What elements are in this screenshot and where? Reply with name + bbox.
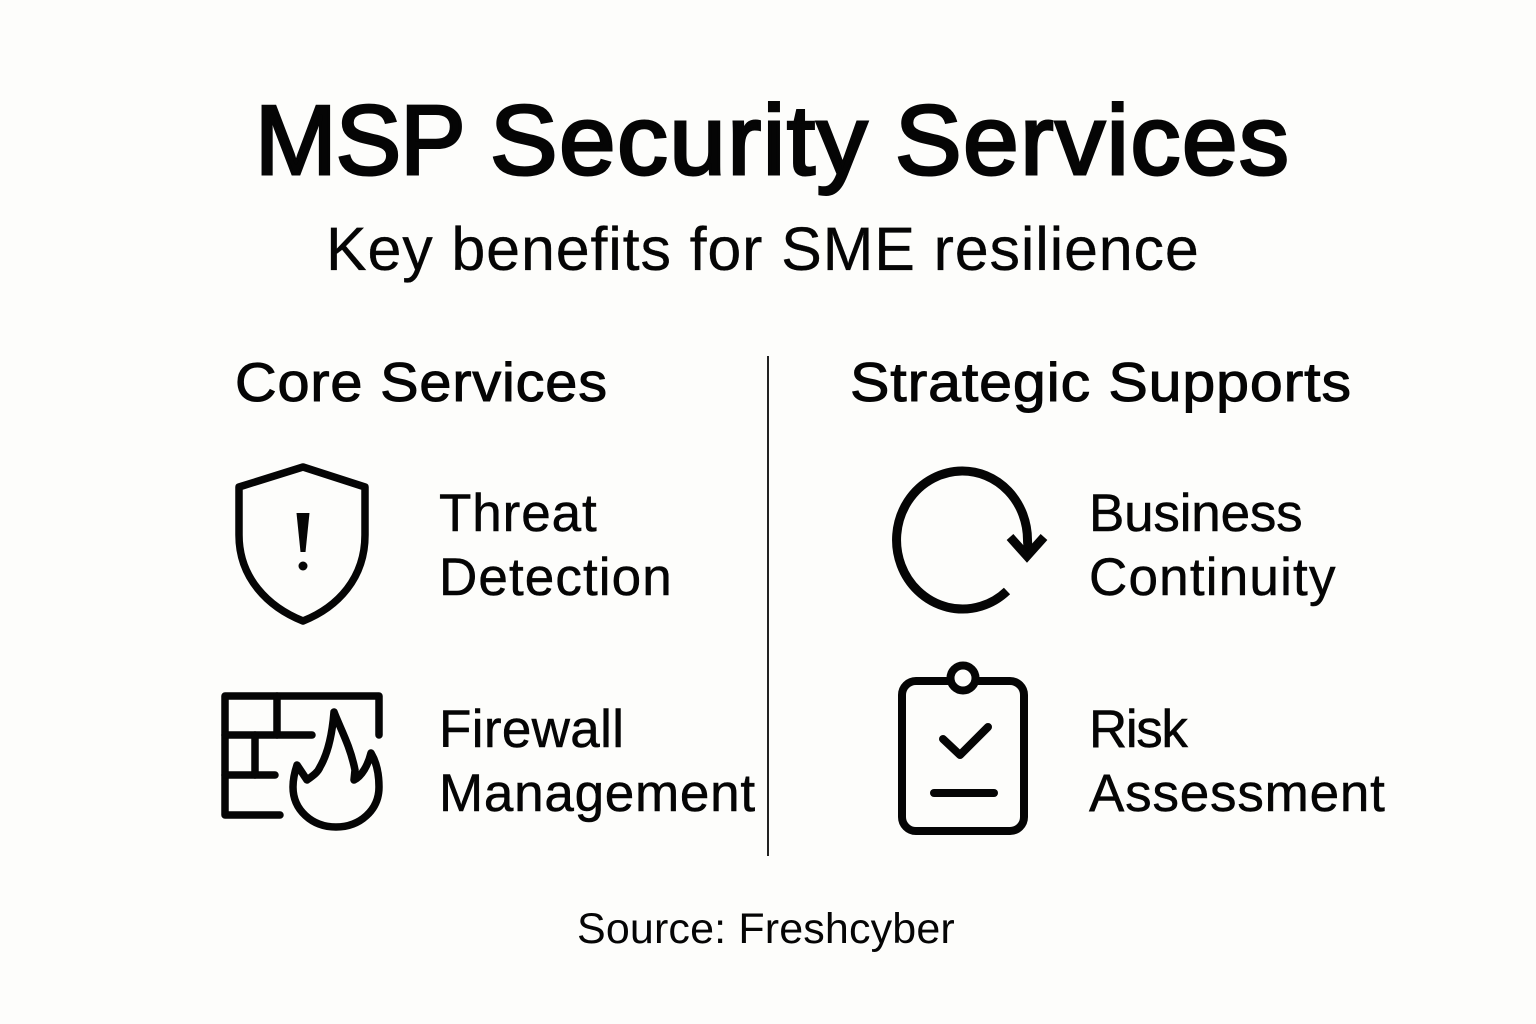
- label: business continuity: Business: [1089, 484, 1302, 543]
- panel: core services: [221, 351, 756, 831]
- label: risk assessment: Risk: [1089, 700, 1186, 759]
- label: business continuity: [1089, 484, 1337, 606]
- label: firewall management: Management: [439, 764, 756, 822]
- title: Security: [490, 84, 869, 194]
- panel: strategic supports: [850, 351, 1386, 835]
- icon: shield with exclamation: [235, 463, 369, 625]
- label: threat detection: Threat: [439, 484, 598, 543]
- label: firewall management: [439, 700, 756, 822]
- title: MSP: [255, 84, 465, 194]
- divider: [767, 356, 769, 856]
- label: threat detection: Detection: [439, 548, 673, 606]
- label: risk assessment: [1088, 700, 1386, 822]
- label: risk assessment: Assessment: [1089, 764, 1386, 822]
- icon: clipboard with check: [898, 662, 1028, 835]
- title: Services: [895, 84, 1291, 194]
- label: threat detection: [439, 484, 673, 606]
- subtitle: Key benefits for SME resilience: [326, 215, 1200, 283]
- heading: core services: Core Services: [235, 351, 608, 413]
- heading: strategic supports: Strategic Supports: [850, 351, 1352, 413]
- icon: firewall with flame: [221, 692, 383, 831]
- label: firewall management: Firewall: [439, 700, 624, 759]
- label: business continuity: Continuity: [1089, 548, 1337, 606]
- source: Source: Freshcyber: [577, 905, 955, 953]
- icon: circular arrow: [892, 466, 1048, 614]
- title: [255, 84, 1291, 196]
